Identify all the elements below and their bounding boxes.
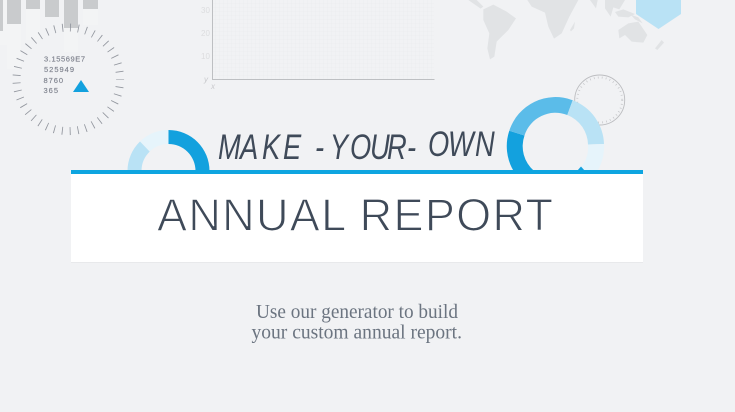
world map [468,0,664,59]
chart axis labels: y [203,75,209,84]
handwritten title: make your own: -YOUR- [315,128,416,167]
chart axis labels [201,6,216,91]
gauge numbers: 8760 [44,76,63,85]
handwritten title: make your own [218,125,495,167]
gauge triangle [73,80,89,92]
chart axis labels: x [210,82,216,91]
handwritten title: make your own: MAKE [218,128,302,167]
heading: annual report: ANNUAL REPORT [157,190,553,240]
handwritten title: make your own: OWN [428,125,495,164]
chart axis labels: 20 [201,29,210,38]
subtitle text [252,301,462,344]
gauge numbers: 525949 [44,65,74,74]
donut chart right [507,97,604,171]
chart axis labels: 10 [201,52,210,61]
chart axis labels: 30 [201,6,210,15]
gauge numbers: 3.15569E7 [44,54,85,64]
gauge ticks [17,28,120,131]
line chart grid [201,0,434,91]
icon: hexagon [636,0,681,29]
icon: small dial [575,75,625,125]
subtitle text: Use our generator to build [256,301,458,323]
blue header bar [71,170,643,174]
subtitle text: your custom annual report. [252,322,462,344]
donut chart left [127,130,210,171]
icon: gray bar chart top left [0,0,98,69]
gauge numbers [44,54,85,95]
gauge numbers: 365 [44,86,58,95]
icon: tick gauge with numbers [17,28,120,131]
panel: title card [71,170,643,263]
chart axes [212,0,434,80]
